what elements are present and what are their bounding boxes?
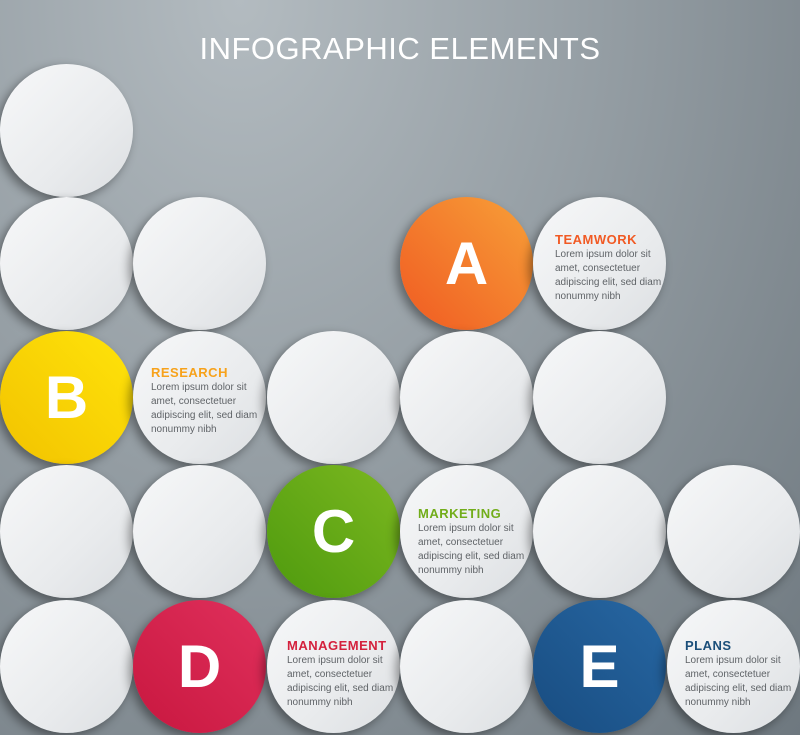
circle [400,331,533,464]
circle D: D [178,633,221,700]
text marketing [418,506,524,576]
text plans: adipiscing elit, sed diam [685,683,791,694]
circle [667,465,800,598]
circle plans [667,600,800,733]
text plans: amet, consectetuer [685,669,770,680]
text research: Lorem ipsum dolor sit [151,382,247,393]
text teamwork: adipiscing elit, sed diam [555,277,661,288]
circle A: A [445,230,488,297]
circle [133,197,266,330]
circle teamwork [533,197,666,330]
circle [133,465,266,598]
text research: nonummy nibh [151,424,217,435]
text marketing: amet, consectetuer [418,537,503,548]
text management: MANAGEMENT [287,638,387,653]
circle management [267,600,400,733]
circle C: C [312,498,355,565]
text teamwork: nonummy nibh [555,291,621,302]
circle A [400,197,533,330]
text management [287,638,393,708]
text teamwork [555,232,661,302]
row 4 circles [0,600,133,733]
circle [533,331,666,464]
row 2 circles: B [0,331,133,464]
row 1 circles [0,197,133,330]
row 2 circles: B: B [45,364,88,431]
text research: amet, consectetuer [151,396,236,407]
title: INFOGRAPHIC ELEMENTS [200,31,600,66]
text marketing: Lorem ipsum dolor sit [418,523,514,534]
text teamwork: amet, consectetuer [555,263,640,274]
circle research [133,331,266,464]
text plans [685,638,791,708]
text teamwork: Lorem ipsum dolor sit [555,249,651,260]
circle E [533,600,666,733]
circle [400,600,533,733]
text management: Lorem ipsum dolor sit [287,655,383,666]
text plans: PLANS [685,638,732,653]
text marketing: nonummy nibh [418,565,484,576]
row 3 circles [0,465,133,598]
text teamwork: TEAMWORK [555,232,637,247]
text marketing: MARKETING [418,506,501,521]
circle [267,331,400,464]
circle marketing [400,465,533,598]
text research: adipiscing elit, sed diam [151,410,257,421]
circle C [267,465,400,598]
text management: nonummy nibh [287,697,353,708]
circle D [133,600,266,733]
text plans: nonummy nibh [685,697,751,708]
text research: RESEARCH [151,365,228,380]
text research [151,365,257,435]
circle [533,465,666,598]
text marketing: adipiscing elit, sed diam [418,551,524,562]
text plans: Lorem ipsum dolor sit [685,655,781,666]
circle E: E [579,633,620,700]
row 0 circle [0,64,133,197]
text management: amet, consectetuer [287,669,372,680]
text management: adipiscing elit, sed diam [287,683,393,694]
